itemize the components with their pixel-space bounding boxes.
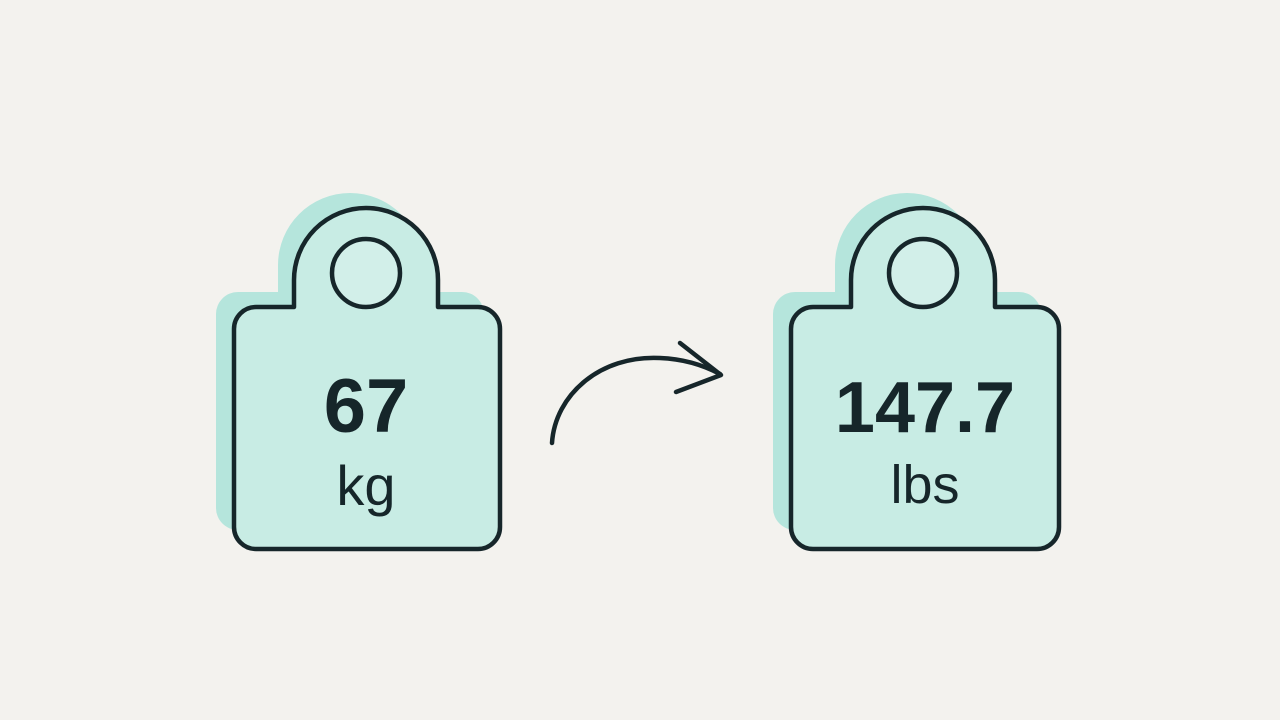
unit kg: kg xyxy=(336,454,396,517)
shadow shape xyxy=(216,193,484,530)
weight outline xyxy=(791,208,1059,549)
unit lbs: lbs xyxy=(890,455,960,515)
weight: 147.7 lbs xyxy=(773,193,1059,549)
shadow shape xyxy=(773,193,1041,530)
weight: 67 kg xyxy=(216,193,500,549)
weight outline xyxy=(234,208,500,549)
value 67: 67 xyxy=(324,364,408,449)
value 147.7: 147.7 xyxy=(835,368,1015,448)
hanging hole xyxy=(332,239,400,307)
arrow xyxy=(552,343,721,443)
hanging hole xyxy=(889,239,957,307)
